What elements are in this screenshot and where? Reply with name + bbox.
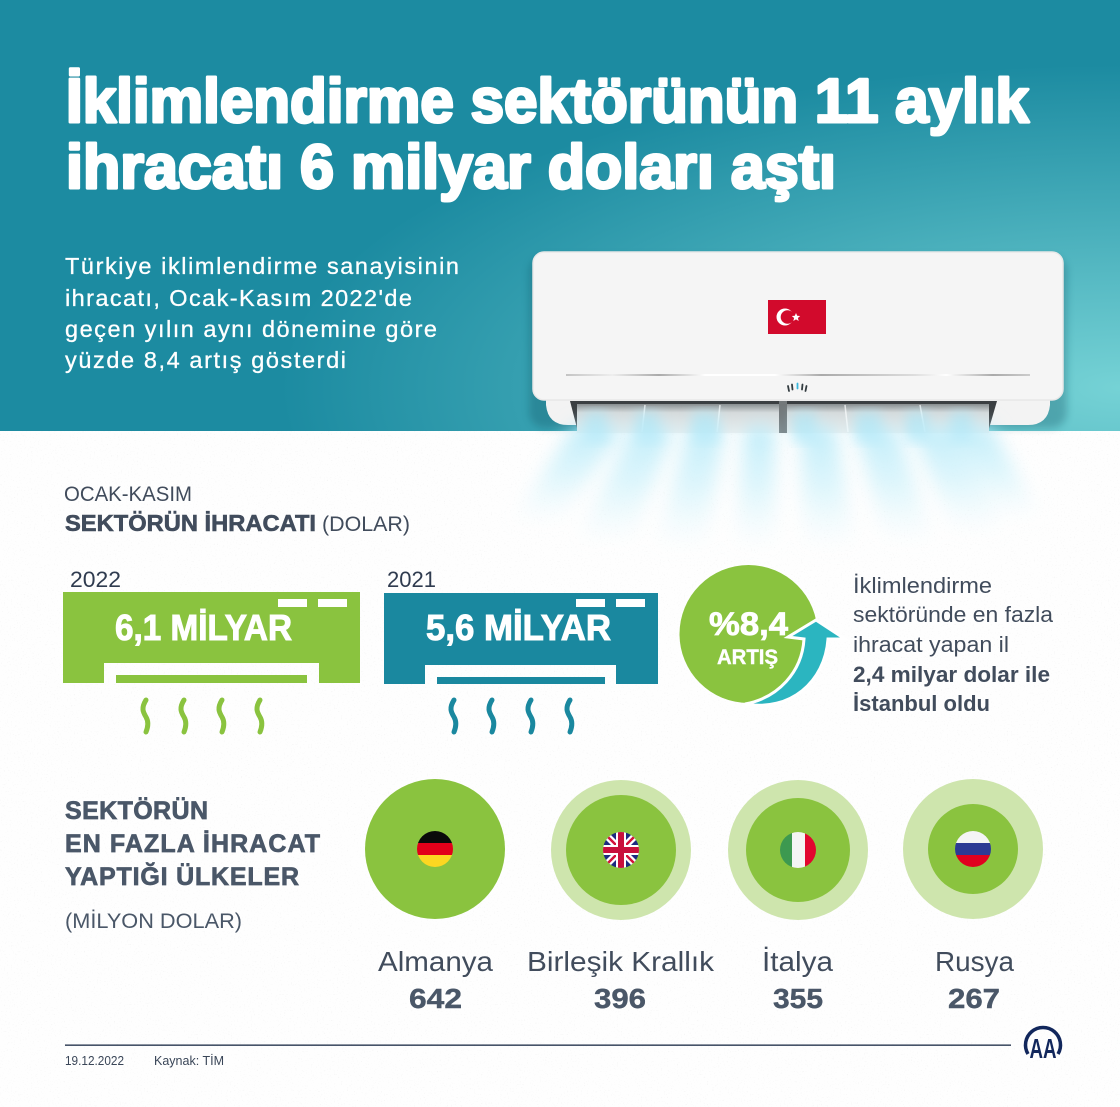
- cold air beams: [510, 412, 1040, 550]
- country: germany: 642: [409, 983, 462, 1014]
- country: italy: [728, 780, 868, 1014]
- section heading: top countries: [65, 796, 320, 933]
- increase badge: %8,4: [709, 606, 788, 642]
- flag: russia: [955, 831, 991, 867]
- section heading: top countries: EN FAZLA İHRACAT: [65, 830, 320, 858]
- arrow: [745, 620, 845, 705]
- lower casing: [546, 395, 1050, 425]
- istanbul note: ihracat yapan il: [853, 632, 1009, 657]
- section heading: sector exports: SEKTÖRÜN İHRACATI: [65, 510, 316, 536]
- istanbul note: İklimlendirme: [853, 573, 992, 598]
- intro text: geçen yılın aynı dönemine göre: [65, 316, 437, 342]
- year 2021 unit: [384, 567, 658, 732]
- turkish flag: [768, 300, 826, 334]
- flag: germany: [417, 831, 453, 867]
- istanbul note: sektöründe en fazla: [853, 602, 1054, 627]
- flag: uk: [603, 832, 639, 868]
- year 2021 unit: 2021: [387, 567, 436, 592]
- year 2022 unit: [63, 567, 360, 732]
- 2022 air waves: [143, 700, 262, 732]
- section heading: top countries: (MİLYON DOLAR): [65, 910, 242, 933]
- section heading: sector exports: OCAK-KASIM: [64, 483, 192, 506]
- istanbul note: [853, 573, 1054, 716]
- country: italy: 355: [773, 983, 823, 1014]
- country: united kingdom: [527, 780, 715, 1014]
- anadolu agency logo: [1026, 1027, 1060, 1064]
- title: [66, 67, 1029, 202]
- flag: italy: [780, 832, 816, 868]
- intro text: ihracatı, Ocak-Kasım 2022'de: [65, 285, 412, 311]
- vent: [570, 401, 997, 433]
- 2021 air waves: [451, 700, 572, 732]
- 2022 panel: [63, 592, 360, 683]
- 2021 panel: [384, 593, 658, 684]
- country: italy: İtalya: [762, 946, 833, 977]
- country: germany: [365, 779, 505, 1014]
- increase badge: ARTIŞ: [717, 646, 778, 669]
- country: russia: [903, 779, 1043, 1014]
- teal header band: [0, 0, 1120, 431]
- intro text: yüzde 8,4 artış gösterdi: [65, 347, 346, 373]
- intro text: [65, 253, 459, 373]
- country: united kingdom: Birleşik Krallık: [527, 946, 715, 977]
- istanbul note: İstanbul oldu: [853, 691, 990, 716]
- silver strip: [566, 374, 1030, 376]
- indicator lights: [788, 384, 806, 391]
- section heading: top countries: YAPTIĞI ÜLKELER: [65, 862, 299, 891]
- section heading: sector exports: [64, 483, 410, 536]
- footer date and source: [65, 1054, 224, 1068]
- istanbul note: 2,4 milyar dolar ile: [853, 662, 1050, 687]
- title: İklimlendirme sektörünün 11 aylık: [66, 67, 1029, 136]
- country: russia: 267: [948, 983, 1000, 1014]
- anadolu agency logo: AA: [1030, 1033, 1056, 1064]
- increase badge: [680, 565, 845, 705]
- year 2022 unit: 2022: [70, 567, 121, 592]
- main body: [533, 252, 1063, 400]
- air conditioner illustration: [529, 252, 1067, 433]
- footer date and source: Kaynak: TİM: [154, 1054, 224, 1068]
- country: russia: Rusya: [935, 946, 1014, 977]
- title: ihracatı 6 milyar doları aştı: [66, 133, 836, 202]
- section heading: top countries: SEKTÖRÜN: [65, 796, 208, 825]
- section heading: sector exports: (DOLAR): [322, 513, 410, 536]
- year 2021 unit: 5,6 MİLYAR: [426, 607, 611, 648]
- intro text: Türkiye iklimlendirme sanayisinin: [65, 253, 459, 279]
- country: germany: Almanya: [378, 946, 493, 977]
- year 2022 unit: 6,1 MİLYAR: [115, 607, 292, 648]
- footer date and source: 19.12.2022: [65, 1054, 124, 1068]
- country: united kingdom: 396: [594, 983, 646, 1014]
